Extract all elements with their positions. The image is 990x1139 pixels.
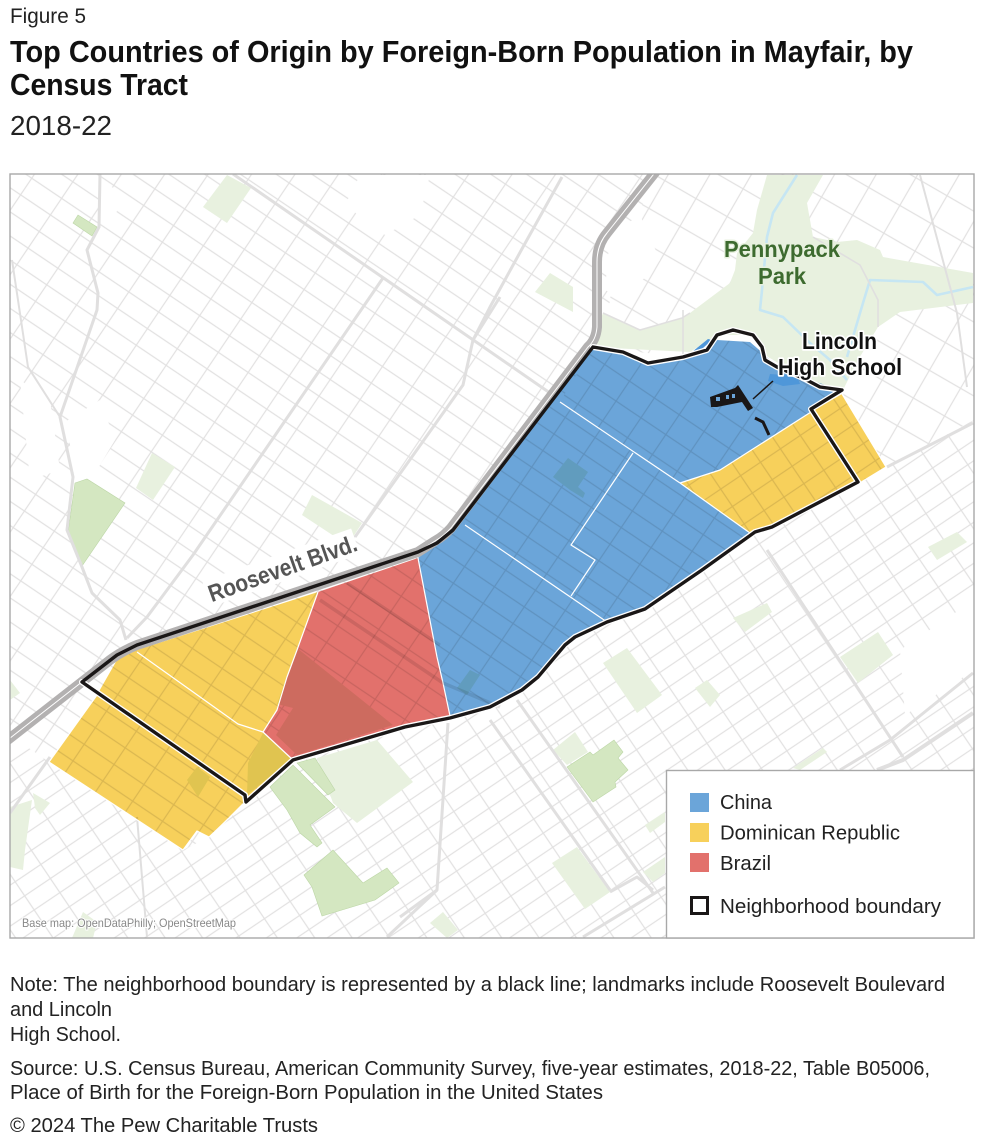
parks: darker green <box>68 215 628 916</box>
tract area: Dominican Republic (east) <box>680 394 886 533</box>
note text: High School. <box>10 1024 121 1046</box>
label: Pennypack Park: Pennypack <box>724 236 840 262</box>
tract area: Dominican Republic (west) <box>49 592 318 850</box>
source text: Source: U.S. Census Bureau, American Community Survey, five-year estimates, 2018-22, Table B05006, <box>10 1058 930 1080</box>
street grid northern tract <box>564 340 826 480</box>
neighborhood boundary <box>82 330 858 802</box>
legend item: Neighborhood boundary: Neighborhood boundary <box>720 896 941 918</box>
panel: map <box>5 170 974 938</box>
leader line to school <box>753 381 773 399</box>
wide roads inside tracts <box>320 583 500 707</box>
Roosevelt Boulevard road <box>5 170 657 742</box>
street grid northeast <box>610 174 974 462</box>
street grid eastern tract <box>686 398 882 532</box>
label: Lincoln High School: High School <box>778 354 902 380</box>
map frame <box>10 174 974 938</box>
legend <box>666 770 974 938</box>
figure number: Figure 5 <box>10 5 86 28</box>
legend item: Brazil <box>690 853 771 875</box>
base map credit: Base map: OpenDataPhilly; OpenStreetMap <box>22 916 236 930</box>
label: Pennypack Park <box>724 238 840 286</box>
major roads <box>10 174 973 937</box>
census tracts coloured by top country <box>49 340 886 850</box>
note text: and Lincoln <box>10 999 112 1021</box>
parks: pale green <box>10 175 973 938</box>
title <box>10 34 914 102</box>
note text: Note: The neighborhood boundary is represented by a black line; landmarks include Roosevelt Boulevard <box>10 974 945 996</box>
street grid northwest and tracts <box>10 174 748 848</box>
legend item: China <box>690 792 773 814</box>
label: Pennypack Park: Park <box>758 263 806 289</box>
blank blocks without streets <box>20 175 974 715</box>
title: Top Countries of Origin by Foreign-Born Population in Mayfair, by <box>10 34 914 69</box>
source text: Place of Birth for the Foreign-Born Population in the United States <box>10 1082 603 1104</box>
note text <box>10 974 945 1046</box>
icon: Lincoln High School building <box>710 385 769 435</box>
legend item: Brazil: Brazil <box>720 853 771 875</box>
subtitle: years: 2018-22 <box>10 110 112 141</box>
title: Census Tract <box>10 67 188 102</box>
label: Lincoln High School <box>778 328 902 380</box>
legend item: China: China <box>720 792 773 814</box>
street grid southeast <box>10 420 974 938</box>
tract area: Brazil <box>263 558 450 760</box>
legend item: Dominican Republic: Dominican Republic <box>720 822 900 844</box>
copyright: © 2024 The Pew Charitable Trusts <box>10 1115 318 1137</box>
patch near school <box>768 374 800 386</box>
label: Lincoln High School: Lincoln <box>802 328 877 354</box>
tract divisions <box>49 394 886 850</box>
label: Roosevelt Blvd.: Roosevelt Blvd. <box>205 530 361 608</box>
tract area: China <box>418 340 842 716</box>
creek <box>760 175 973 380</box>
source text <box>10 1058 930 1104</box>
